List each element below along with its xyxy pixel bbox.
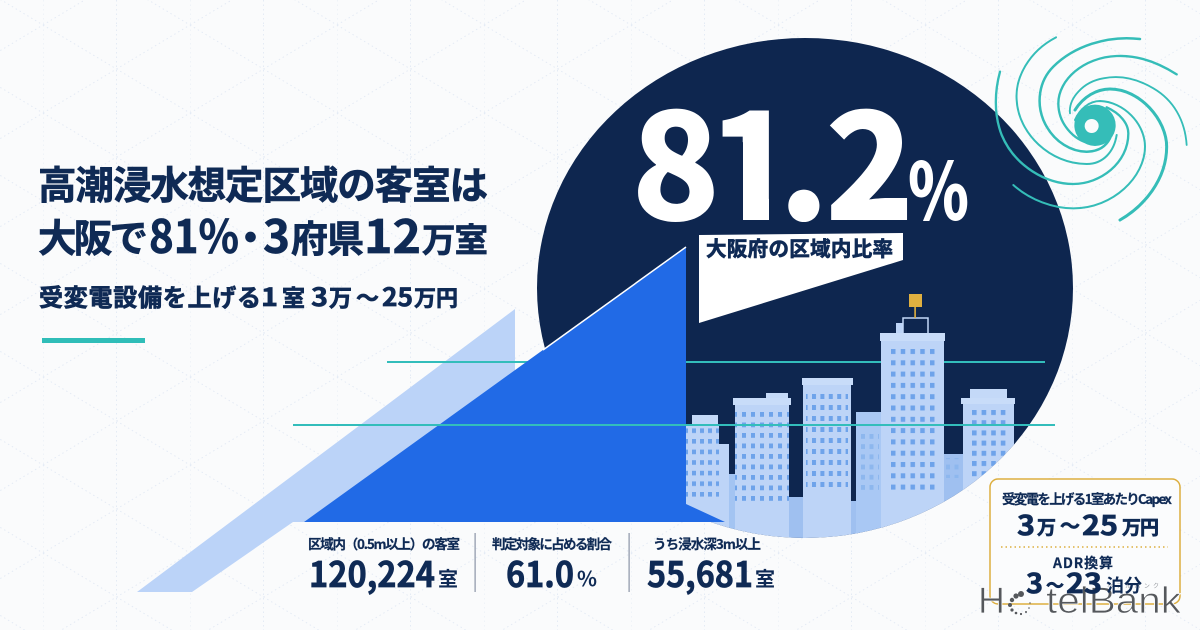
ADR nights figure: 3 xyxy=(1026,562,1043,601)
big number 81.2%: . xyxy=(778,50,830,263)
title: 12 xyxy=(364,201,421,267)
stat: rooms in zone: 120,224 xyxy=(309,547,435,598)
capex box: 3 xyxy=(1017,504,1035,543)
building C xyxy=(802,378,853,550)
big number 81.2%: 8 xyxy=(631,50,721,263)
capex box: ADR換算 xyxy=(1052,553,1113,573)
title xyxy=(38,155,488,267)
stats row xyxy=(308,533,775,598)
tallest building with rooftop xyxy=(880,294,945,551)
building D xyxy=(856,412,881,534)
capex box: 25 xyxy=(1082,504,1118,543)
stat: share: 判定対象に占める割合 xyxy=(492,533,612,553)
title: 81% xyxy=(149,201,239,267)
stat: deep rooms: 55,681 xyxy=(647,547,753,598)
subtitle: 室 xyxy=(282,279,305,313)
ADR nights figure: 23 xyxy=(1066,562,1102,601)
icon: typhoon swirl xyxy=(996,37,1187,220)
stat: share: 61.0 xyxy=(506,547,574,598)
stat: rooms in zone: 区域内（0.5m以上）の客室 xyxy=(308,533,460,553)
capex box: 万 xyxy=(1037,513,1056,540)
title: 大阪で xyxy=(38,208,148,264)
subtitle: 万円 xyxy=(414,281,458,313)
stat: deep rooms: 室 xyxy=(755,563,775,592)
horizontal water level line upper xyxy=(387,361,1045,363)
city skyline xyxy=(686,294,1015,551)
subtitle: 受変電設備を上げる xyxy=(39,278,261,313)
stat: rooms in zone: 室 xyxy=(438,563,458,592)
building F xyxy=(961,389,1015,490)
capex box: 〜 xyxy=(1060,510,1080,539)
logo dots ring xyxy=(1008,591,1031,615)
big number 81.2%: 2 xyxy=(825,50,915,263)
subtitle: 3 xyxy=(311,278,328,314)
stat: share xyxy=(492,533,612,598)
watermark logo: HotelBank xyxy=(978,580,1182,621)
big number 81.2% xyxy=(638,108,968,222)
light blue diagonal band xyxy=(137,309,515,592)
watermark logo: HotelBank: telBank xyxy=(1046,580,1182,621)
dark circle panel xyxy=(537,38,1073,538)
subtitle xyxy=(39,278,458,314)
blue triangle xyxy=(304,247,725,522)
title: 万室 xyxy=(422,213,488,262)
title: 高潮浸水想定区域の客室は xyxy=(38,155,488,211)
stat: rooms in zone xyxy=(308,533,460,598)
capex box: 万円 xyxy=(1122,513,1159,540)
subtitle: 1 xyxy=(261,278,278,314)
building B xyxy=(733,393,791,550)
stat: share: % xyxy=(577,563,597,592)
watermark logo: HotelBank: ホテルバンク xyxy=(1107,583,1159,590)
stat: deep rooms: うち浸水深3m以上 xyxy=(653,533,761,553)
ADR nights figure xyxy=(1026,562,1142,601)
ADR nights figure: 〜 xyxy=(1046,572,1064,598)
title: ・ xyxy=(231,208,270,264)
callout: Osaka share xyxy=(699,232,903,323)
big number 81.2%: 1 xyxy=(708,50,798,263)
callout: Osaka share: 大阪府の区域内比率 xyxy=(706,232,893,262)
subtitle: 〜 xyxy=(356,279,379,313)
big number 81.2%: % xyxy=(908,128,969,243)
title: 府県 xyxy=(291,209,364,263)
title: 3 xyxy=(263,201,290,267)
horizontal water level line lower xyxy=(293,424,1055,426)
accent bar xyxy=(42,338,145,343)
capex box: 受変電を上げる1室あたりCapex xyxy=(1002,488,1172,508)
capex box xyxy=(990,479,1180,604)
subtitle: 25 xyxy=(382,278,413,314)
subtitle: 万 xyxy=(329,279,352,313)
watermark logo: HotelBank: H xyxy=(978,580,1005,621)
ADR nights figure: 泊分 xyxy=(1106,572,1142,598)
building A xyxy=(686,415,719,525)
